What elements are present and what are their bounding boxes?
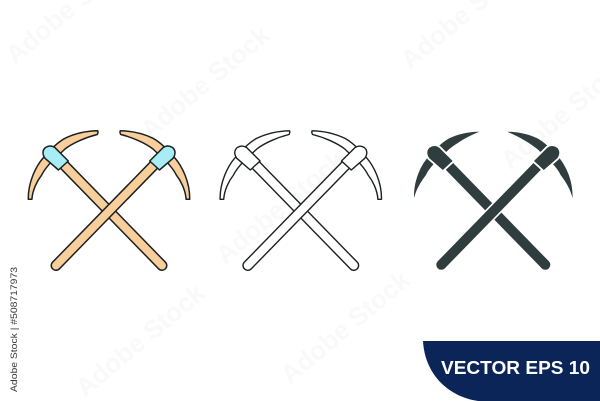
infographic canvas: Adobe Stock (275, 264, 416, 390)
infographic canvas: Adobe Stock (135, 19, 276, 145)
icon: coloured crossed pickaxes (28, 131, 190, 266)
infographic canvas: Adobe Stock (70, 277, 211, 401)
icon: solid dark crossed pickaxes (414, 132, 573, 270)
stock id vertical caption: Adobe Stock | #508717973 (9, 267, 20, 392)
infographic canvas: Adobe Stock (210, 144, 351, 270)
banner label: VECTOR EPS 10 (441, 357, 590, 378)
right pickaxe, solid (436, 132, 573, 270)
left pickaxe, outline (220, 131, 354, 266)
banner: vector eps 10 (423, 341, 600, 401)
right pickaxe, coloured (56, 131, 190, 266)
icon: outline crossed pickaxes (220, 131, 382, 266)
right pickaxe, outline (248, 131, 382, 266)
left pickaxe, coloured (28, 131, 162, 266)
left pickaxe, solid (414, 132, 550, 270)
